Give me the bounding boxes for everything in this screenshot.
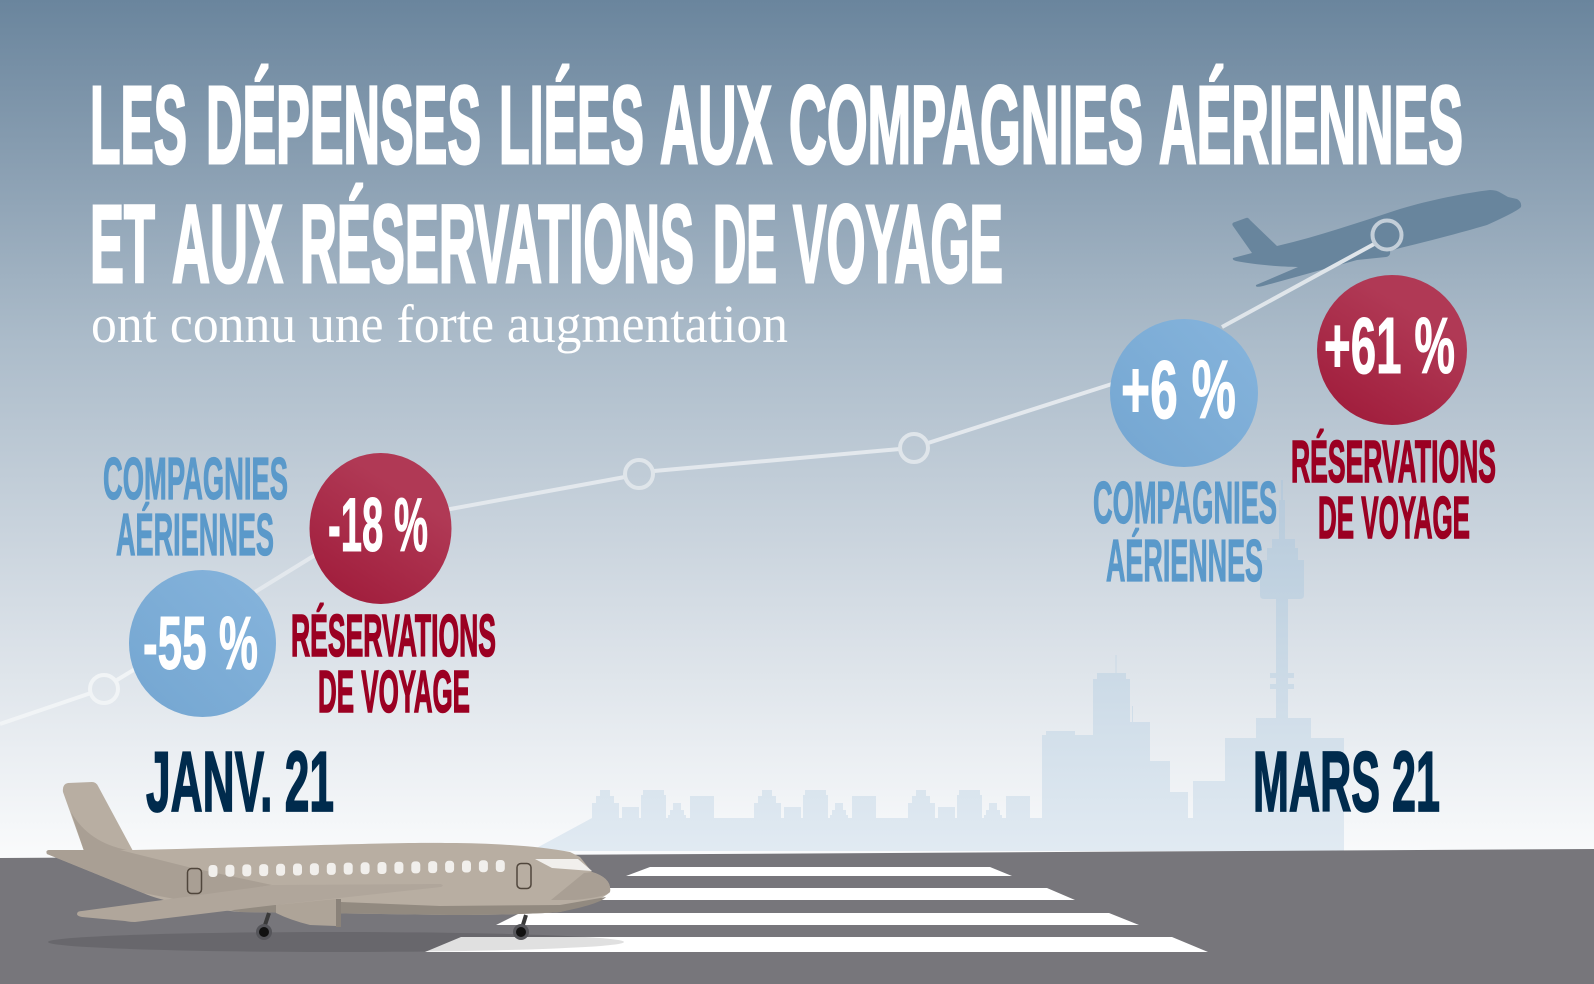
bubble: -55 % bbox=[129, 570, 276, 717]
title: VOYAGE bbox=[793, 183, 1003, 306]
landing gear bbox=[256, 913, 529, 940]
bubble: +6 %: +6 % bbox=[1121, 343, 1236, 436]
runway stripes bbox=[425, 867, 1208, 952]
march figures bbox=[1093, 275, 1496, 594]
wing bbox=[77, 884, 443, 922]
title: LES bbox=[90, 64, 187, 187]
title: AUX bbox=[660, 64, 772, 187]
january figures: AÉRIENNES bbox=[116, 502, 274, 568]
doors bbox=[188, 864, 531, 894]
title: DE bbox=[713, 183, 777, 306]
january figures: COMPAGNIES bbox=[103, 446, 288, 512]
label: réservations de voyage bbox=[1291, 429, 1496, 551]
title: AUX bbox=[172, 183, 283, 306]
title bbox=[90, 64, 1463, 306]
icon: plane on runway bbox=[46, 782, 610, 940]
bubble: -18 % bbox=[310, 453, 452, 604]
cockpit window bbox=[535, 859, 592, 871]
city skyline bbox=[531, 480, 1344, 851]
bubble: +61 % bbox=[1317, 275, 1467, 425]
title: RÉSERVATIONS bbox=[300, 183, 694, 306]
march figures: COMPAGNIES bbox=[1093, 470, 1277, 536]
plane shadow bbox=[48, 932, 624, 952]
label: compagnies aériennes bbox=[1093, 470, 1277, 594]
label: compagnies aériennes bbox=[103, 446, 288, 568]
cabin windows bbox=[208, 860, 505, 877]
subtitle: ont connu une forte augmentation bbox=[91, 294, 788, 354]
bubble: +6 % bbox=[1110, 319, 1258, 467]
date: janvier 21: JANV. 21 bbox=[146, 735, 334, 830]
label: réservations de voyage bbox=[291, 603, 496, 725]
trend line over the plane bbox=[1222, 243, 1376, 327]
runway ground bbox=[0, 849, 1594, 984]
tail fin bbox=[63, 782, 133, 851]
icon: plane in flight bbox=[1232, 190, 1521, 287]
fuselage bbox=[46, 843, 610, 915]
bubble: -55 %: -55 % bbox=[143, 601, 258, 685]
title: ET bbox=[90, 183, 155, 306]
engine fairing bbox=[276, 899, 336, 926]
trend line end marker bbox=[1372, 220, 1402, 250]
text: RÉSERVATIONS bbox=[291, 603, 496, 669]
label: réservations de voyage: DE VOYAGE bbox=[318, 659, 470, 725]
bubble: -18 %: -18 % bbox=[328, 483, 428, 568]
trend line bbox=[0, 384, 1112, 724]
january figures bbox=[103, 446, 496, 725]
title: LIÉES bbox=[499, 64, 644, 187]
bubble: +61 %: +61 % bbox=[1324, 301, 1455, 390]
march figures: AÉRIENNES bbox=[1106, 528, 1263, 594]
title: COMPAGNIES bbox=[789, 64, 1143, 187]
title: DÉPENSES bbox=[206, 64, 481, 187]
